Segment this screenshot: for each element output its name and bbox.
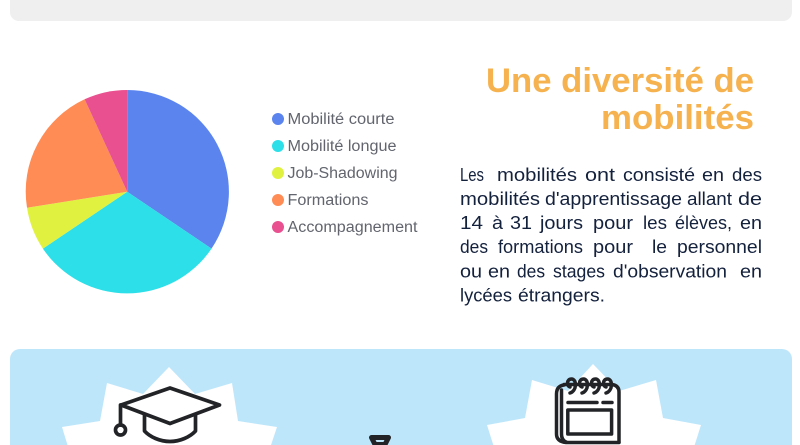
icon: hourglass (top edge)	[372, 438, 388, 444]
text block: description: d'apprentissage	[545, 188, 682, 209]
text block: description: de	[738, 188, 762, 209]
icon: spiral notebook calendar	[556, 379, 619, 442]
text block: description: formations	[498, 236, 583, 257]
text block: description: jours	[539, 212, 583, 233]
panel: grey top band	[10, 0, 792, 21]
text block: description: étrangers.	[518, 284, 605, 306]
text block: description: 31	[510, 212, 532, 233]
legend item: Accompagnement: Accompagnement	[288, 219, 418, 236]
text block: description: d'observation	[613, 260, 727, 282]
text block: description	[460, 164, 762, 306]
text block: description: élèves,	[675, 212, 732, 233]
badge: right white star	[487, 364, 701, 445]
slice: Job-Shadowing	[27, 192, 127, 249]
text block: description: mobilités	[460, 188, 540, 209]
legend item: Mobilité courte: Mobilité courte	[288, 111, 394, 128]
text block: description: des	[460, 236, 488, 257]
text block: description: le	[652, 236, 667, 257]
text block: description: stages	[553, 260, 605, 282]
heading: mobilités	[601, 99, 754, 137]
text block: description: 14	[460, 212, 483, 233]
slice: Formations	[26, 99, 127, 208]
text block: description: en	[488, 260, 510, 282]
heading: Une diversité de	[486, 62, 754, 100]
text block: description: des	[517, 260, 545, 282]
heading	[486, 62, 754, 137]
icon: graduation cap	[116, 388, 220, 442]
text block: description: en	[702, 164, 724, 185]
text block: description: à	[492, 212, 504, 233]
panel: light blue band	[10, 349, 792, 445]
text block: description: en	[740, 212, 762, 233]
text block: description: pour	[593, 212, 633, 233]
text block: description: les	[643, 212, 667, 233]
badge: left white star	[62, 367, 277, 445]
legend item: Formations: Formations	[288, 192, 369, 209]
slice: Accompagnement	[85, 90, 127, 192]
text block: description: mobilités	[497, 164, 577, 185]
legend item: Job-Shadowing: Job-Shadowing	[288, 165, 398, 182]
text block: description: des	[732, 164, 762, 185]
text block: description: consisté	[623, 164, 695, 185]
legend item: Mobilité longue: Mobilité longue	[288, 138, 396, 155]
text block: description: lycées	[460, 284, 512, 306]
text block: description: Les	[460, 164, 484, 185]
text block: description: pour	[593, 236, 633, 257]
text block: description: personnel	[677, 236, 762, 257]
pie chart: types of mobility	[26, 90, 229, 293]
text block: description: en	[740, 260, 762, 282]
slice: Mobilité longue	[43, 192, 212, 293]
text block: description: allant	[687, 188, 733, 209]
text block: description: ont	[585, 164, 616, 185]
text block: description: ou	[460, 260, 482, 282]
slice: Mobilité courte	[127, 90, 229, 249]
legend	[272, 111, 418, 236]
